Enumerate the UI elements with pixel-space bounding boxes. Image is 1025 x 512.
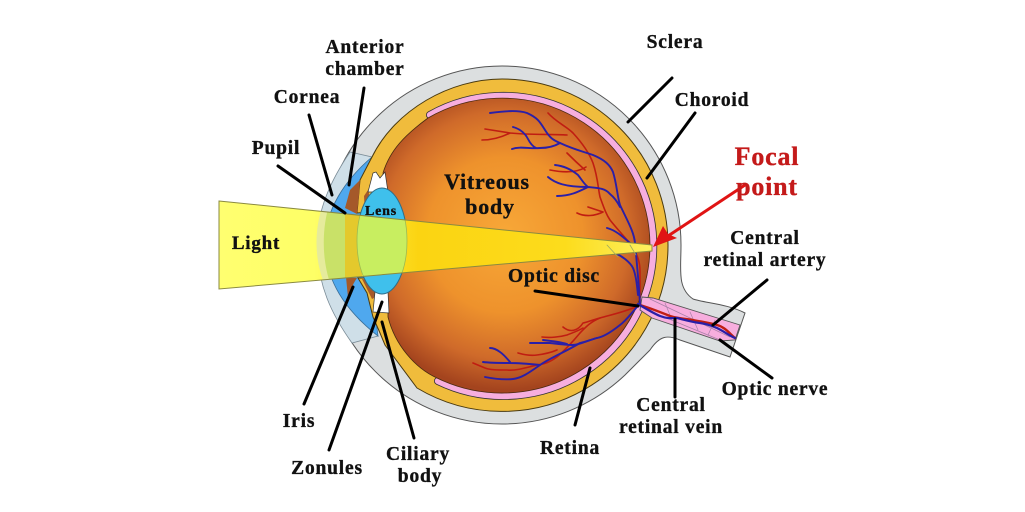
beam through lens [356, 216, 408, 276]
zonules upper [368, 172, 388, 192]
optic nerve canal [640, 297, 740, 341]
focal point shimmer lines [607, 245, 636, 257]
label: Vitreous body: Vitreous [444, 169, 530, 194]
label: Ciliary body: body [398, 466, 442, 487]
zonules lower [373, 292, 389, 313]
iris lower [346, 277, 378, 299]
retinal blood vessels [473, 111, 640, 379]
vitreous body [383, 98, 650, 393]
label: Iris: Iris [283, 411, 315, 432]
beam through cornea [316, 212, 329, 280]
label: Central retinal vein: retinal vein [619, 417, 723, 438]
label: Central retinal vein: Central [636, 395, 706, 416]
light beam [218, 200, 652, 290]
focal point arrow [653, 185, 745, 247]
label: Vitreous body: body [465, 194, 515, 219]
label: Optic disc: Optic disc [508, 266, 600, 287]
label: Pupil: Pupil [252, 138, 300, 159]
label: Lens: Lens [365, 204, 397, 219]
label: Light: Light [232, 233, 280, 254]
beam through iris [345, 214, 362, 278]
label: Retina: Retina [540, 438, 600, 459]
optic nerve vessels [638, 299, 735, 340]
anterior chamber fluid [325, 157, 378, 336]
sclera and optic nerve sheath [323, 66, 745, 424]
label: Sclera: Sclera [647, 32, 703, 53]
label: Choroid: Choroid [675, 90, 749, 111]
label: Focal point: Focal [735, 142, 799, 171]
eye anatomy diagram [218, 34, 828, 487]
retina [430, 96, 653, 396]
iris upper [345, 180, 374, 215]
label: Anterior chamber: Anterior [326, 37, 404, 58]
leader lines [278, 78, 772, 450]
label: Zonules: Zonules [291, 458, 363, 479]
label: Optic nerve: Optic nerve [722, 379, 828, 400]
label: Ciliary body: Ciliary [386, 444, 450, 465]
label: Focal point: point [736, 172, 798, 201]
lens [357, 188, 407, 294]
label: Central retinal artery: Central [730, 228, 800, 249]
choroid [357, 79, 668, 411]
label: Anterior chamber: chamber [325, 59, 405, 80]
cornea outer layer [317, 152, 378, 343]
label: Cornea: Cornea [274, 87, 340, 108]
label: Central retinal artery: retinal artery [704, 250, 826, 271]
